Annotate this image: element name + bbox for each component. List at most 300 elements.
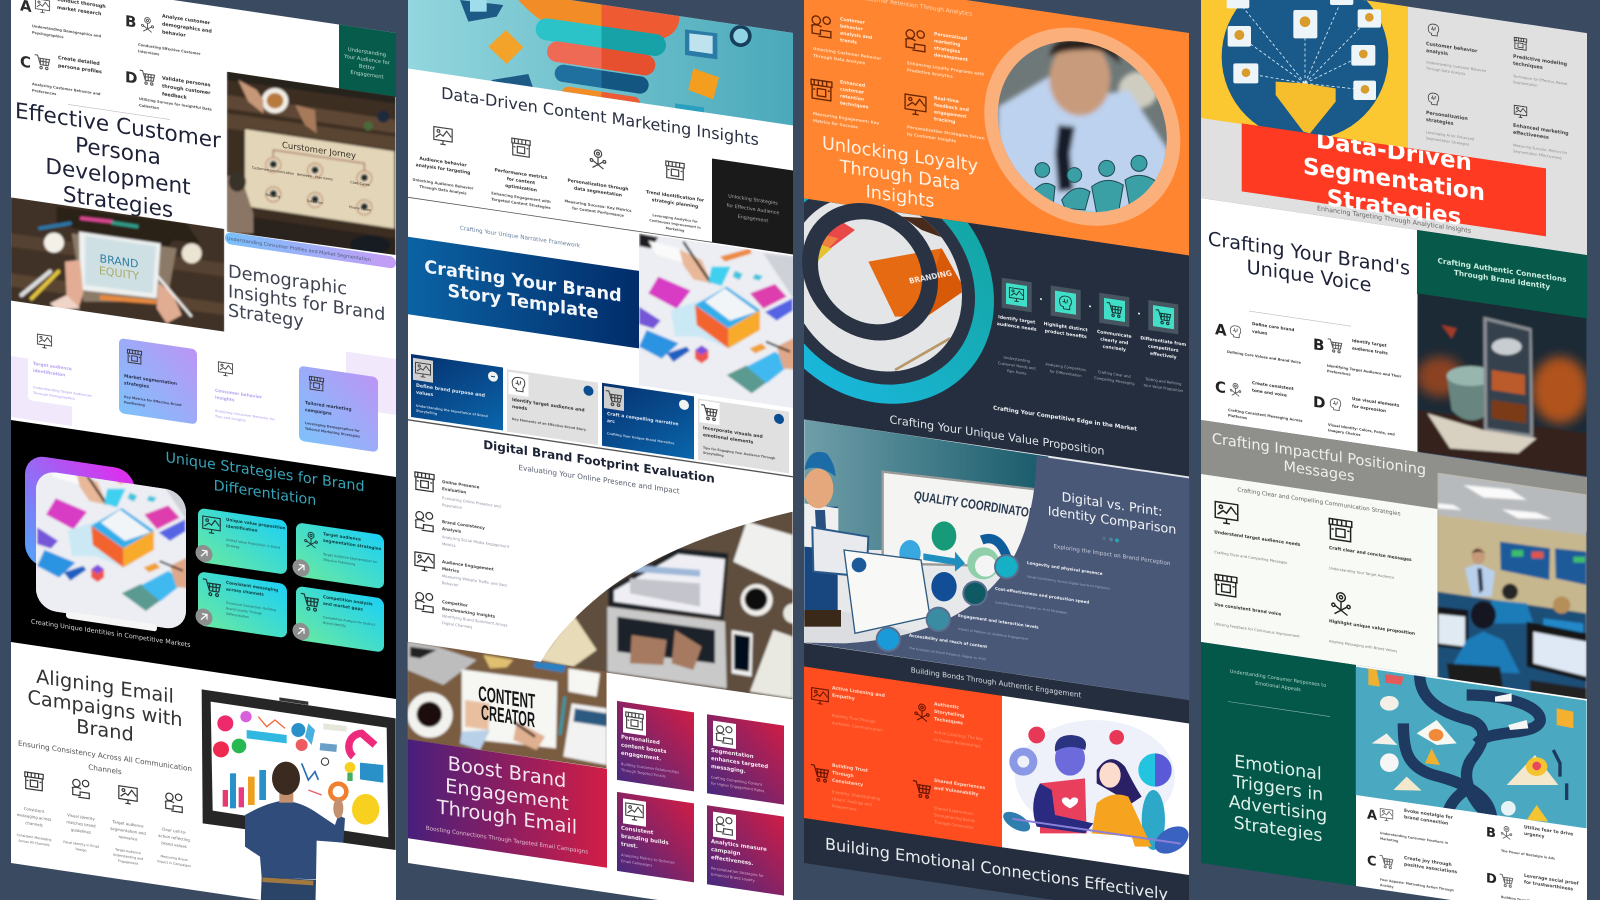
card: compelling narrative: Craft a compelling narrative bbox=[607, 412, 678, 428]
item: predictive modeling: Segmentation bbox=[1513, 80, 1537, 88]
step 1: Consistent Messaging bbox=[17, 833, 51, 842]
item: understand needs: Crafting Clear and Compelling Messages bbox=[1214, 550, 1287, 565]
card: target segmentation: Target audience bbox=[323, 531, 361, 542]
item B: B bbox=[1486, 825, 1496, 842]
card: consumer behavior: Tips and Insights bbox=[215, 414, 246, 423]
illustration: funnel bbox=[460, 0, 752, 117]
item B: Interviews bbox=[138, 49, 159, 56]
card: segmentation bbox=[707, 714, 784, 805]
item: building trust: Building Trust bbox=[832, 764, 868, 774]
item: identify needs: Identify target bbox=[998, 315, 1035, 326]
item D: D bbox=[125, 68, 137, 88]
row: cost: Cost-Effectiveness: Digital vs. Print Strategies bbox=[995, 600, 1067, 615]
panel: digital brand footprint: CREATOR bbox=[481, 701, 535, 732]
item: real-time feedback bbox=[905, 91, 985, 148]
item: differentiate: effectively bbox=[1150, 351, 1177, 361]
title: Strategies bbox=[1234, 813, 1322, 846]
item A bbox=[1215, 316, 1302, 365]
item D: Utilizing Surveys for Insightful Data bbox=[139, 97, 212, 112]
item: audience behavior: Through Data Analysis bbox=[419, 185, 467, 196]
panel: emotional triggers bbox=[1201, 642, 1587, 900]
caption: Creating Unique Identities in Competitive Markets bbox=[31, 617, 191, 649]
item: audience engagement: Behavior bbox=[442, 581, 459, 588]
card: tailored marketing: Tailored marketing bbox=[305, 401, 352, 413]
eyebrow: Emotional Appeals bbox=[1255, 681, 1301, 693]
title: Effective Customer Persona: Strategies bbox=[63, 182, 173, 223]
item: enhanced retention bbox=[811, 75, 879, 133]
column 3 bbox=[802, 0, 1190, 900]
card: tailored marketing: Tailored Marketing Strategies bbox=[305, 427, 360, 439]
item: personalization: data segmentation bbox=[574, 186, 622, 199]
item: customer behavior: Customer behavior bbox=[1426, 42, 1477, 55]
item A bbox=[20, 0, 106, 46]
item: understand needs: Understand target audience needs bbox=[1214, 529, 1301, 548]
card: analytics bbox=[707, 805, 784, 896]
callout text: for Effective Audience bbox=[727, 203, 779, 216]
item A: values bbox=[1252, 329, 1268, 336]
card lettering: BRANDING bbox=[908, 268, 953, 286]
item D bbox=[125, 68, 212, 118]
panel: brand unique voice bbox=[1201, 198, 1588, 477]
item B: Utilize fear to drive bbox=[1524, 825, 1573, 838]
item: storytelling bbox=[915, 698, 984, 749]
item: storytelling: Authentic bbox=[934, 702, 959, 711]
title: Identity Comparison bbox=[1048, 504, 1176, 538]
card: analytics: effectiveness. bbox=[711, 855, 753, 867]
item C: Analyzing Customer Behavior and bbox=[32, 82, 100, 96]
item: identify needs: audience needs bbox=[997, 321, 1037, 333]
card: define brand purpose: values bbox=[416, 390, 433, 398]
item: enhanced retention: Metrics for Success bbox=[813, 118, 858, 130]
eyebrow: Understanding Consumer Responses to bbox=[1230, 669, 1326, 689]
item: trend identification: Marketing bbox=[666, 226, 685, 233]
item: trend identification bbox=[646, 158, 705, 236]
item: building trust: Perspectives bbox=[832, 803, 857, 812]
green heading: Through Brand Identity bbox=[1454, 268, 1550, 291]
item: highlight benefits: for Differentiation bbox=[1050, 369, 1082, 378]
photo: brand equity tablet bbox=[10, 197, 225, 333]
row: longevity bbox=[1027, 560, 1110, 591]
card: consistent messaging: Differentiation bbox=[226, 612, 249, 619]
photo labels: Selection bbox=[307, 199, 323, 205]
step 2: Visual identity bbox=[67, 812, 95, 821]
card: consumer behavior: Consumer behavior bbox=[215, 389, 262, 401]
item: shared experiences: Through Connection bbox=[933, 819, 974, 830]
card: tailored marketing: campaigns bbox=[305, 407, 332, 417]
item D: Use visual elements bbox=[1352, 396, 1399, 408]
subtitle: Enhancing Targeting Through Analytical Insights bbox=[1317, 204, 1472, 235]
item: understand needs bbox=[1214, 501, 1301, 567]
panel: crafting brand story bbox=[408, 218, 797, 477]
step 3: Understanding and bbox=[113, 853, 143, 861]
item A: market research bbox=[57, 5, 102, 17]
slate panel bbox=[804, 456, 1189, 700]
item C: positive associations bbox=[1404, 862, 1457, 875]
callout text: Engagement bbox=[350, 70, 384, 81]
item C bbox=[1215, 375, 1303, 429]
item: customer behavior: analysis bbox=[1426, 48, 1448, 57]
item: building trust: Empathy: Understanding bbox=[832, 789, 880, 801]
step 2: Design bbox=[75, 847, 87, 853]
title: Digital Brand Footprint Evaluation bbox=[483, 438, 715, 486]
item D: Validate personas bbox=[162, 76, 210, 89]
title: Data-Driven Content Marketing Insights bbox=[441, 83, 759, 149]
item: identify needs bbox=[997, 277, 1037, 377]
item A: Define core brand bbox=[1252, 321, 1294, 332]
item: enhanced marketing: effectiveness bbox=[1513, 130, 1549, 141]
item: storytelling: Active Listening: The Key bbox=[934, 729, 983, 741]
item: enhanced marketing: Segmentation Effectiveness bbox=[1513, 149, 1562, 160]
card: consistent branding: Email Campaigns bbox=[621, 859, 652, 868]
item A: brand connection bbox=[1404, 814, 1448, 827]
item: highlight value: Aligning Messaging with Brand Values bbox=[1329, 639, 1397, 653]
item C: Create consistent bbox=[1252, 380, 1294, 391]
item: personalization: strategies bbox=[1426, 117, 1454, 127]
card: identify target bbox=[507, 369, 598, 445]
title: Data-Driven bbox=[1316, 128, 1472, 177]
item B: behavior bbox=[162, 29, 186, 39]
item: predictive modeling: techniques bbox=[1513, 61, 1543, 71]
title: Unique Voice bbox=[1247, 255, 1371, 297]
item: customer behavior: Customer bbox=[840, 17, 865, 26]
card: define brand purpose: Define brand purpose and bbox=[416, 384, 485, 399]
notebook lettering: CONTENT bbox=[478, 682, 535, 714]
column 2 bbox=[407, 0, 803, 900]
title: Campaigns with bbox=[27, 686, 183, 731]
card: personalized content: engagement. bbox=[621, 751, 661, 762]
item B: Preferences bbox=[1327, 369, 1351, 377]
item: active listening bbox=[812, 682, 885, 733]
item: competitor benchmarking: Competitor bbox=[442, 599, 468, 608]
item B: urgency bbox=[1524, 831, 1545, 840]
ring overlay bbox=[810, 203, 930, 341]
subtitle: Channels bbox=[88, 762, 122, 776]
item: audience engagement: Metrics bbox=[442, 566, 460, 574]
item: enhanced retention: customer bbox=[840, 86, 865, 96]
card: market segmentation: strategies bbox=[124, 380, 149, 390]
card: identify target: Identify target audience and bbox=[512, 398, 585, 414]
item: building trust bbox=[811, 760, 881, 815]
card: consistent branding: Consistent bbox=[621, 826, 653, 836]
card: segmentation: Segmentation bbox=[711, 748, 754, 760]
card: market segmentation: Key Metrics for Effective Brand bbox=[124, 395, 182, 407]
item B: Identifying Target Audience and Their bbox=[1327, 364, 1401, 379]
step 3: Engagement bbox=[118, 859, 139, 866]
item A: Defining Core Values and Brand Voice bbox=[1227, 350, 1302, 365]
item B: demographics and bbox=[162, 21, 212, 35]
card: analytics: Personalization Strategies for bbox=[711, 866, 764, 878]
card: target segmentation bbox=[292, 522, 384, 589]
card: compelling narrative: Crafting Your Unique Brand Narrative bbox=[607, 431, 675, 446]
step 4 bbox=[157, 791, 191, 868]
item D: Leverage social proof bbox=[1524, 874, 1579, 887]
item B: audience traits bbox=[1352, 345, 1388, 356]
photo labels: Phone Times bbox=[349, 205, 371, 212]
item: consistent voice bbox=[1214, 574, 1300, 639]
title: Emotional bbox=[1234, 752, 1322, 785]
item: communicate clearly: concisely bbox=[1103, 344, 1126, 353]
item: differentiate: competitors bbox=[1148, 343, 1179, 354]
item: customer behavior: behavior bbox=[840, 23, 863, 33]
item C: Create detailed bbox=[58, 56, 100, 67]
title: Aligning Email bbox=[36, 665, 174, 708]
title: Demographic Insights: Strategy bbox=[228, 300, 304, 332]
panel: data-driven content marketing bbox=[408, 0, 793, 900]
column 4 bbox=[1201, 0, 1588, 900]
photo labels: Case Cases bbox=[350, 180, 370, 187]
graphic: branding rings bbox=[804, 198, 994, 404]
item: audience engagement bbox=[415, 552, 508, 595]
item C: Crafting Consistent Messaging Across bbox=[1228, 408, 1303, 423]
subtitle pill bbox=[225, 232, 396, 269]
row: engagement: Impact of Medium on Audience Engagement bbox=[958, 627, 1029, 641]
item A bbox=[1367, 802, 1454, 851]
card: personalized content bbox=[617, 701, 694, 791]
card: unique value: identification bbox=[226, 523, 257, 533]
card: target audience: identification bbox=[33, 368, 65, 379]
item: communicate clearly: Communicate bbox=[1097, 330, 1132, 340]
item D: D bbox=[1313, 393, 1325, 412]
title: Insights bbox=[866, 182, 934, 212]
title band bbox=[408, 237, 639, 348]
item: consistent voice: Use consistent brand voice bbox=[1214, 602, 1281, 618]
item: shared experiences bbox=[913, 775, 985, 832]
panel: demographic insights cards bbox=[11, 302, 396, 474]
step 3: Target Audience bbox=[115, 847, 141, 855]
title: Crafting Impactful Positioning bbox=[1212, 430, 1426, 479]
subtitle: Exploring the Impact on Brand Perception bbox=[1054, 544, 1171, 567]
panel: digital brand footprint bbox=[407, 428, 803, 770]
step 3 bbox=[110, 784, 146, 867]
photo: businessman with figures bbox=[998, 41, 1167, 212]
item: trend identification: strategic planning bbox=[652, 197, 698, 210]
item: audience engagement: Measuring Website Traffic and User bbox=[442, 574, 507, 588]
step 2: guidelines bbox=[71, 827, 91, 835]
item: audience behavior bbox=[413, 123, 474, 197]
item: customer behavior: Through Data Analysis bbox=[813, 53, 866, 66]
card: consistent messaging: Emotional Connection: Building bbox=[226, 601, 276, 612]
card: consumer behavior bbox=[215, 361, 275, 427]
item C: Fear Appeals: Motivating Action Through bbox=[1380, 878, 1454, 892]
item: predictive modeling bbox=[1512, 37, 1568, 92]
panel: boost brand engagement bbox=[408, 670, 784, 896]
item: shared experiences: Shared Experiences bbox=[934, 779, 985, 791]
item C: Platforms bbox=[1228, 414, 1247, 420]
card: target audience bbox=[33, 333, 92, 403]
callout text: Better bbox=[359, 64, 376, 72]
card: tailored marketing: Leveraging Demographics for bbox=[305, 421, 360, 433]
item: storytelling: to Deeper Relationships bbox=[934, 737, 980, 749]
item: shared experiences: and Vulnerability bbox=[934, 785, 978, 798]
item: highlight benefits: Analyzing Competitors bbox=[1045, 362, 1086, 372]
item: personalized marketing: marketing bbox=[934, 38, 960, 48]
item: personalization: Measuring Success: Key Metrics bbox=[565, 199, 631, 213]
item: active listening: Building Trust Through bbox=[832, 713, 876, 724]
row: accessibility bbox=[908, 632, 987, 662]
panel: digital vs print bbox=[795, 419, 1189, 700]
item A: Understanding Demographics and bbox=[32, 24, 101, 38]
card: unique value: Strategy bbox=[226, 543, 240, 549]
item: performance metrics: Performance metrics bbox=[495, 168, 547, 181]
item: brand consistency: Analyzing Social Media Engagement bbox=[442, 535, 509, 549]
item C bbox=[20, 49, 102, 103]
row: longevity: Longevity and physical presence bbox=[1027, 560, 1103, 576]
illustration: audience funnel bbox=[1222, 0, 1388, 140]
item: consistent voice: Utilizing Feedback for Continuous Improvement bbox=[1214, 622, 1300, 639]
subtitle: Evaluating Your Online Presence and Impact bbox=[518, 463, 680, 496]
panel: impactful positioning bbox=[1201, 420, 1587, 703]
item: personalization bbox=[565, 145, 632, 219]
item: personalized marketing: Enhancing Loyalty Programs with bbox=[907, 60, 984, 77]
item: differentiate: Your Value Proposition bbox=[1143, 383, 1183, 393]
pill text: Understanding Consumer Profiles and Market Segmentation bbox=[227, 236, 371, 263]
item B bbox=[1486, 819, 1573, 863]
item: customer behavior: Unlocking Customer Behavior bbox=[813, 46, 881, 61]
step 1: messaging across bbox=[17, 812, 51, 822]
item: performance metrics: optimization bbox=[505, 183, 537, 194]
item: performance metrics: Enhancing Engagement with bbox=[491, 191, 551, 204]
item: enhanced retention: retention bbox=[840, 93, 864, 103]
title: Strategies bbox=[1327, 185, 1461, 231]
title: Engagement bbox=[445, 774, 569, 815]
step 2 bbox=[63, 777, 99, 855]
card: consumer behavior: Insights bbox=[215, 395, 235, 404]
item: brand consistency: Brand Consistency bbox=[442, 519, 485, 530]
step 4: Clear call-to- bbox=[162, 826, 186, 835]
item: audience behavior: analysis for targeting bbox=[416, 162, 470, 176]
card: competition analysis: Competition analysis bbox=[323, 594, 373, 607]
step 4: brand values bbox=[161, 840, 187, 849]
card: identify target: needs bbox=[512, 404, 527, 412]
item: competitor benchmarking bbox=[415, 591, 507, 635]
item C: Anxiety bbox=[1380, 883, 1395, 889]
row: cost: Cost-effectiveness and production speed bbox=[995, 586, 1089, 605]
title: Advertising bbox=[1229, 792, 1327, 827]
card: analytics: campaign bbox=[711, 847, 741, 857]
portrait ring bbox=[984, 14, 1180, 239]
item: craft clear bbox=[1329, 518, 1412, 583]
card: personalized content: Building Customer Relationships bbox=[621, 762, 679, 775]
item: differentiate bbox=[1140, 299, 1186, 394]
item A: Understanding Consumer Emotions in bbox=[1380, 831, 1448, 845]
card: unique value: Unified Value Proposition in Brand bbox=[226, 538, 280, 550]
item: communicate clearly bbox=[1094, 292, 1135, 386]
item A: Psychographics bbox=[32, 31, 64, 39]
item: trend identification: Trend identification for bbox=[646, 190, 704, 204]
photo: content creator bbox=[407, 640, 608, 770]
panel: unique strategies bbox=[11, 420, 396, 699]
item: personalized marketing: strategies bbox=[934, 45, 961, 55]
title: Unlocking Loyalty bbox=[822, 134, 978, 177]
title: Crafting Your Unique Value Proposition bbox=[889, 413, 1105, 458]
item: identify needs: Customer Needs and bbox=[998, 361, 1036, 371]
item B: Conducting Effective Customer bbox=[138, 43, 201, 56]
item: competitor benchmarking: Digital Channels bbox=[442, 621, 472, 630]
item: real-time feedback: engagement bbox=[934, 109, 967, 120]
item C: persona profiles bbox=[58, 63, 102, 75]
item: enhanced marketing bbox=[1513, 105, 1569, 161]
card: target audience: Understanding Target Audiences bbox=[33, 385, 92, 398]
item: personalization: Personalization bbox=[1426, 111, 1468, 122]
row: longevity: Visual Consistency Across Digital and Print Platforms bbox=[1027, 575, 1110, 591]
card: visuals and emotion: Storytelling bbox=[703, 451, 724, 458]
card: personalized content: content boosts bbox=[621, 743, 666, 755]
item C: Preferences bbox=[32, 89, 56, 96]
panel: customer persona strategies bbox=[10, 0, 397, 900]
card: consumer behavior: Analyzing Consumer Behavior for bbox=[215, 409, 275, 422]
item B: B bbox=[1313, 335, 1324, 355]
item: storytelling: Storytelling bbox=[934, 709, 964, 719]
item: predictive modeling: Techniques for Effective Market bbox=[1513, 74, 1568, 86]
card: segmentation: for Higher Engagement Rates bbox=[711, 781, 764, 793]
photo labels bbox=[252, 166, 371, 212]
row: engagement bbox=[958, 613, 1039, 643]
title: Segmentation bbox=[1303, 154, 1485, 207]
item: enhanced retention: techniques bbox=[840, 100, 869, 111]
eyebrow: Crafting Your Unique Narrative Framework bbox=[460, 226, 581, 250]
item C: C bbox=[1215, 378, 1226, 397]
item: performance metrics: for content bbox=[507, 176, 536, 186]
item: identify needs: Pain Points bbox=[1007, 369, 1027, 376]
photo labels: Between · Plan Items bbox=[297, 172, 333, 182]
tagline: Crafting Your Competitive Edge in the Market bbox=[993, 406, 1137, 433]
step 1: Across All Channels bbox=[18, 839, 50, 847]
title: Crafting Your Brand bbox=[424, 256, 622, 307]
panel: building emotional connections bbox=[804, 643, 1193, 900]
item: performance metrics: Targeted Content Strategies bbox=[491, 197, 551, 210]
step 2: Visual Identity in Email bbox=[63, 840, 99, 849]
title: Demographic Insights: Demographic bbox=[228, 261, 347, 300]
item: enhanced retention: Measuring Engagement: Key bbox=[813, 111, 879, 126]
card: consistent messaging: Consistent messaging bbox=[226, 580, 278, 593]
card: segmentation: enhances targeted bbox=[711, 756, 768, 770]
photo: quality coordinator: QUALITY COORDINATOR bbox=[913, 488, 1037, 521]
photo: control room bbox=[1437, 470, 1587, 703]
item: differentiate: Testing and Refining bbox=[1145, 377, 1181, 386]
title: Triggers in bbox=[1232, 772, 1323, 806]
title: Brand bbox=[76, 715, 134, 746]
item A: Marketing bbox=[1380, 837, 1399, 843]
item D: Visual Identity: Colors, Fonts, and bbox=[1328, 423, 1395, 437]
step 1 bbox=[17, 771, 51, 847]
item: brand consistency bbox=[415, 510, 510, 556]
item: real-time feedback: by Customer Insights bbox=[907, 131, 957, 144]
row: cost bbox=[995, 586, 1089, 618]
item: online presence: Reputation bbox=[442, 503, 463, 510]
title: Crafting Your Brand's bbox=[1208, 227, 1410, 280]
item B: B bbox=[125, 12, 136, 32]
illustration: man at whiteboard bbox=[202, 689, 396, 900]
title: Demographic Insights: Insights for Brand bbox=[228, 281, 385, 325]
card: unique value: Unique value proposition bbox=[226, 517, 286, 531]
item: active listening: Authentic Communication bbox=[832, 720, 883, 733]
item C: C bbox=[20, 52, 31, 72]
item A: A bbox=[1367, 808, 1378, 824]
card: segmentation: messaging. bbox=[711, 764, 746, 775]
item: personalized marketing: Personalized bbox=[934, 32, 967, 42]
callout text: Engagement bbox=[738, 214, 768, 224]
callout text: Your Audience for bbox=[343, 54, 391, 67]
item D: for trustworthiness bbox=[1524, 879, 1573, 893]
title: Boost Brand bbox=[448, 752, 566, 792]
green callout bbox=[339, 25, 396, 97]
card: consistent messaging: Brand Loyalty Through bbox=[226, 606, 262, 616]
tablet text: EQUITY bbox=[99, 264, 139, 283]
item C: tone and voice bbox=[1252, 388, 1287, 398]
title: Effective Customer Persona: Effective Customer bbox=[15, 99, 221, 154]
item A: A bbox=[1215, 320, 1227, 340]
item: highlight benefits bbox=[1044, 284, 1089, 379]
